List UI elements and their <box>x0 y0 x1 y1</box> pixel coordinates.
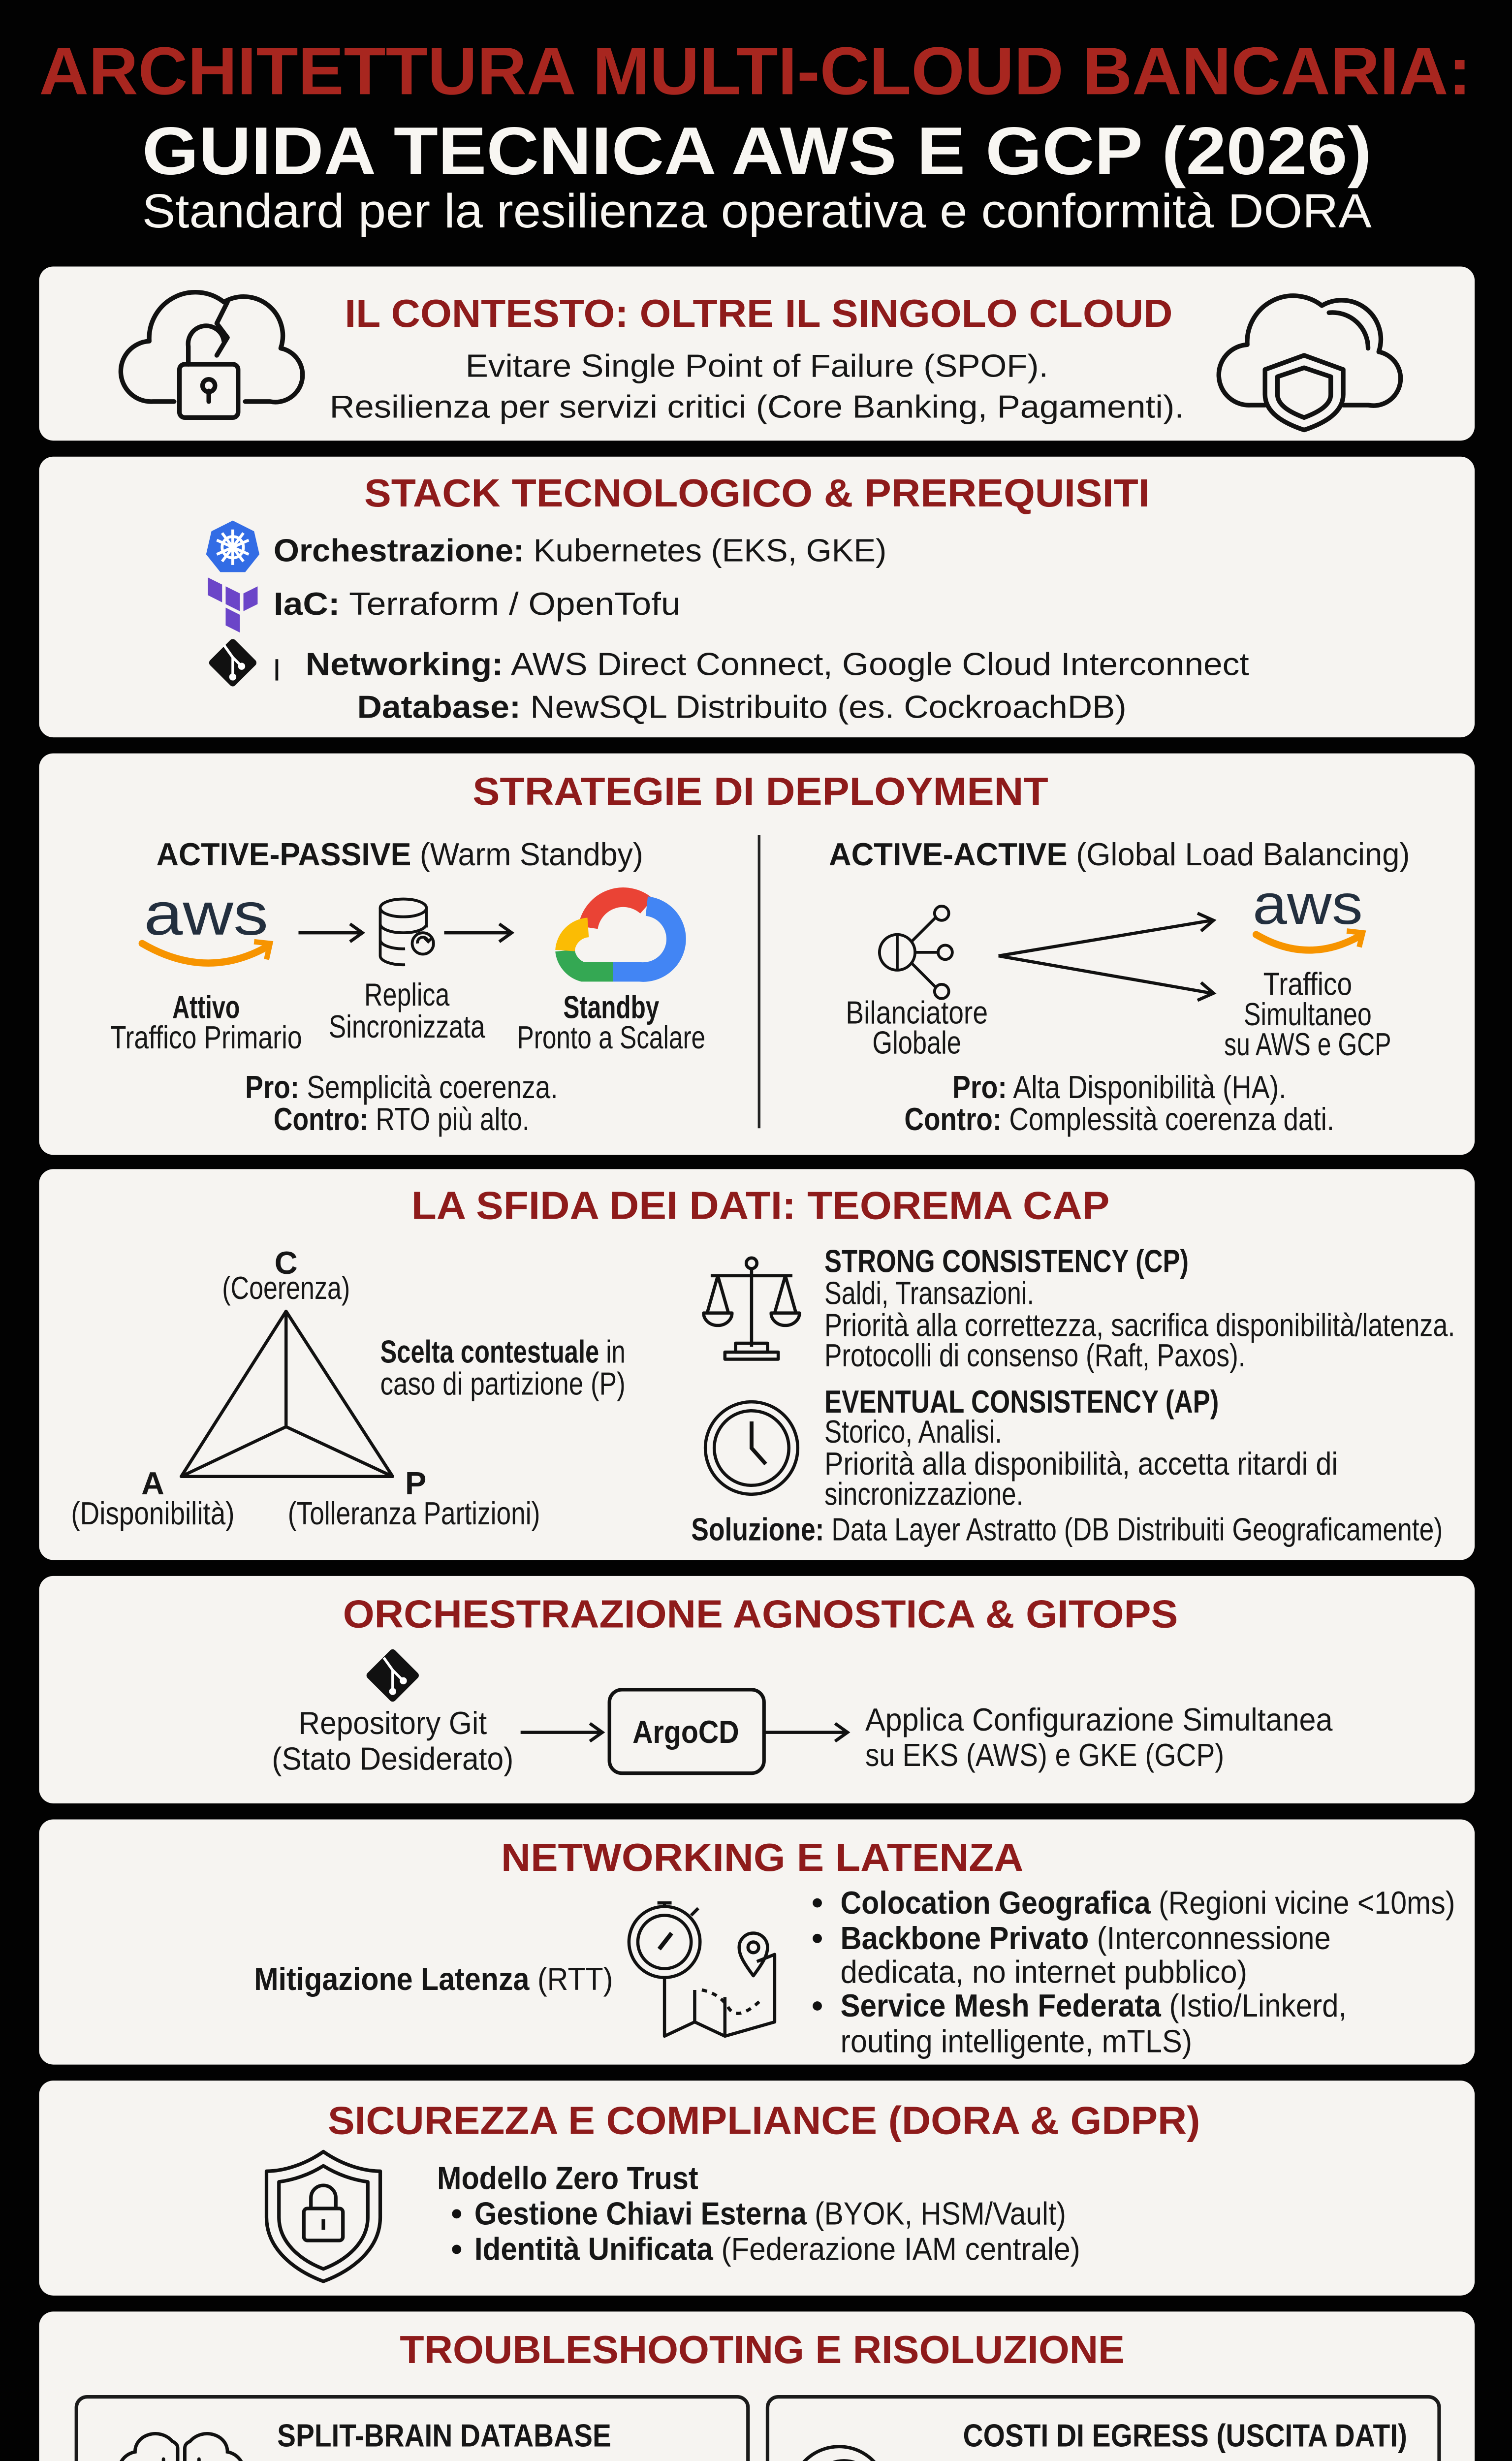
labels: active-passive <box>110 977 705 1137</box>
heading: stack: STACK TECNOLOGICO & PREREQUISITI <box>364 471 1150 515</box>
text: iac: IaC: Terraform / OpenTofu <box>274 586 681 622</box>
text: zero trust <box>437 2160 1080 2267</box>
text: strong consistency: STRONG CONSISTENCY (CP) <box>824 1243 1189 1279</box>
icon: google cloud <box>565 897 676 972</box>
labels: active-passive: Pronto a Scalare <box>517 1019 705 1055</box>
text: repository: (Stato Desiderato) <box>272 1740 513 1776</box>
icon: broken cloud lock <box>121 292 303 417</box>
list: networking bullets: Service Mesh Federata (Istio/Linkerd, <box>840 1988 1347 2023</box>
icon: terraform <box>208 577 257 632</box>
labels: active-passive: Attivo <box>172 989 240 1025</box>
icon: aws left: aws <box>144 881 268 948</box>
chart: CAP triangle: (Tolleranza Partizioni) <box>288 1495 540 1531</box>
text: egress: COSTI DI EGRESS (USCITA DATI) <box>963 2418 1407 2454</box>
text: networking: Networking: AWS Direct Connect, Google Cloud Interconnect <box>306 646 1249 682</box>
icon: kubernetes <box>206 521 259 572</box>
icon: database <box>380 899 434 965</box>
arrows: split <box>999 913 1214 1000</box>
text: orchestrazione: Orchestrazione: Kubernetes (EKS, GKE) <box>274 533 886 568</box>
panel: troubleshooting <box>39 2311 1475 2461</box>
box: ArgoCD <box>609 1690 764 1773</box>
text: scelta contestuale <box>380 1334 626 1402</box>
text: applica <box>865 1702 1333 1773</box>
text: repository <box>272 1705 513 1776</box>
chart: CAP triangle: (Disponibilità) <box>71 1495 235 1531</box>
text: contesto <box>330 347 1184 424</box>
arrow <box>444 924 512 942</box>
heading: contesto: IL CONTESTO: OLTRE IL SINGOLO CLOUD <box>345 291 1173 335</box>
heading: networking: NETWORKING E LATENZA <box>501 1835 1023 1879</box>
list: networking bullets <box>813 1885 1455 2059</box>
chart: CAP triangle: (Coerenza) <box>222 1270 350 1306</box>
title: ARCHITETTURA MULTI-CLOUD BANCARIA: <box>39 33 1471 109</box>
icon: aws left <box>142 881 270 963</box>
labels: active-active: Traffico <box>1263 966 1352 1002</box>
panel: sicurezza <box>39 2081 1475 2296</box>
text: scelta contestuale: Scelta contestuale in <box>380 1334 626 1370</box>
text: eventual consistency: Priorità alla disponibilità, accetta ritardi di <box>824 1446 1338 1482</box>
text: contesto: Resilienza per servizi critici (Core Banking, Pagamenti). <box>330 388 1184 424</box>
subtitle: Standard per la resilienza operativa e conformità DORA <box>142 184 1372 238</box>
text: zero trust: Gestione Chiavi Esterna (BYOK, HSM/Vault) <box>474 2195 1066 2231</box>
heading: sicurezza: SICUREZZA E COMPLIANCE (DORA & GDPR) <box>328 2098 1200 2142</box>
icon: dollar arrow <box>791 2447 935 2461</box>
icon: shield lock <box>266 2151 380 2281</box>
list: networking bullets: Colocation Geografica (Regioni vicine <10ms) <box>840 1885 1455 1921</box>
labels: active-passive: Standby <box>563 989 659 1025</box>
box: ArgoCD: ArgoCD <box>632 1714 739 1750</box>
icon: scale <box>704 1258 799 1359</box>
icon: brain <box>117 2434 246 2461</box>
text: zero trust: Modello Zero Trust <box>437 2160 698 2196</box>
text: eventual consistency <box>824 1384 1338 1512</box>
icon: aws right: aws <box>1253 873 1363 936</box>
column: active-active <box>829 836 1410 1137</box>
labels: active-active: Contro: Complessità coerenza dati. <box>904 1101 1334 1137</box>
labels: active-active: su AWS e GCP <box>1224 1026 1391 1062</box>
panel: contesto <box>39 266 1475 441</box>
heading: troubleshooting: TROUBLESHOOTING E RISOLUZIONE <box>400 2328 1125 2371</box>
labels: active-passive: Sincronizzata <box>329 1009 485 1044</box>
labels: active-active: Bilanciatore <box>846 994 988 1030</box>
text: zero trust: Identità Unificata (Federazione IAM centrale) <box>474 2231 1080 2267</box>
column: active-passive <box>110 836 705 1137</box>
panel: gitops <box>39 1576 1475 1803</box>
arrow <box>764 1724 848 1741</box>
heading: CAP: LA SFIDA DEI DATI: TEOREMA CAP <box>411 1183 1109 1227</box>
text: mitigazione: Mitigazione Latenza (RTT) <box>254 1961 613 1997</box>
panel: CAP <box>39 1169 1475 1560</box>
icon: stopwatch map <box>629 1903 775 2036</box>
labels: active-passive: Pro: Semplicità coerenza. <box>245 1069 558 1105</box>
icon: git repo <box>365 1648 420 1703</box>
list: networking bullets: dedicata, no internet pubblico) <box>840 1954 1247 1990</box>
chart: CAP triangle: A <box>141 1465 164 1501</box>
heading: deployment: STRATEGIE DI DEPLOYMENT <box>472 769 1048 813</box>
heading: gitops: ORCHESTRAZIONE AGNOSTICA & GITOPS <box>343 1592 1178 1636</box>
chart: CAP triangle: P <box>405 1465 426 1501</box>
panel: stack <box>39 457 1475 737</box>
text: eventual consistency: EVENTUAL CONSISTENCY (AP) <box>824 1384 1219 1420</box>
column: active-passive: ACTIVE-PASSIVE (Warm Standby) <box>157 836 643 872</box>
text: strong consistency: Saldi, Transazioni. <box>824 1275 1034 1311</box>
list: networking bullets: routing intelligente, mTLS) <box>840 2023 1192 2059</box>
labels: active-active: Pro: Alta Disponibilità (HA). <box>952 1069 1287 1105</box>
chart: CAP triangle <box>71 1245 540 1531</box>
text: applica: su EKS (AWS) e GKE (GCP) <box>865 1737 1224 1773</box>
list: networking bullets: Backbone Privato (Interconnessione <box>840 1920 1331 1956</box>
arrow <box>298 924 362 942</box>
card: split-brain <box>76 2397 748 2461</box>
card: egress <box>767 2397 1439 2461</box>
text: database: Database: NewSQL Distribuito (es. CockroachDB) <box>357 689 1127 725</box>
text: scelta contestuale: caso di partizione (P) <box>380 1366 626 1402</box>
labels: active-active: Globale <box>872 1025 961 1061</box>
icon: git <box>208 637 258 688</box>
text: applica: Applica Configurazione Simultanea <box>865 1702 1333 1737</box>
title: GUIDA TECNICA AWS E GCP (2026) <box>142 114 1372 189</box>
panel: deployment <box>39 754 1475 1155</box>
text: eventual consistency: Storico, Analisi. <box>824 1414 1002 1450</box>
labels: active-passive: Traffico Primario <box>110 1019 302 1055</box>
text: eventual consistency: sincronizzazione. <box>824 1476 1023 1512</box>
text: strong consistency <box>824 1243 1455 1373</box>
labels: active-passive: Contro: RTO più alto. <box>274 1101 530 1137</box>
icon: balancer <box>880 906 952 999</box>
text: strong consistency: Protocolli di consenso (Raft, Paxos). <box>824 1337 1246 1373</box>
icon: clock <box>705 1402 798 1494</box>
labels: active-active: Simultaneo <box>1244 996 1372 1032</box>
icon: cloud shield <box>1219 296 1401 430</box>
chart: CAP triangle: C <box>275 1245 298 1281</box>
column: active-active: ACTIVE-ACTIVE (Global Load Balancing) <box>829 836 1410 872</box>
title <box>39 33 1471 189</box>
text: split-brain: SPLIT-BRAIN DATABASE <box>277 2418 611 2454</box>
text: repository: Repository Git <box>298 1705 487 1741</box>
panel: networking <box>39 1819 1475 2065</box>
text: contesto: Evitare Single Point of Failure (SPOF). <box>466 347 1048 383</box>
labels: active-active <box>846 966 1391 1137</box>
labels: active-passive: Replica <box>364 977 450 1012</box>
arrow <box>521 1724 602 1741</box>
